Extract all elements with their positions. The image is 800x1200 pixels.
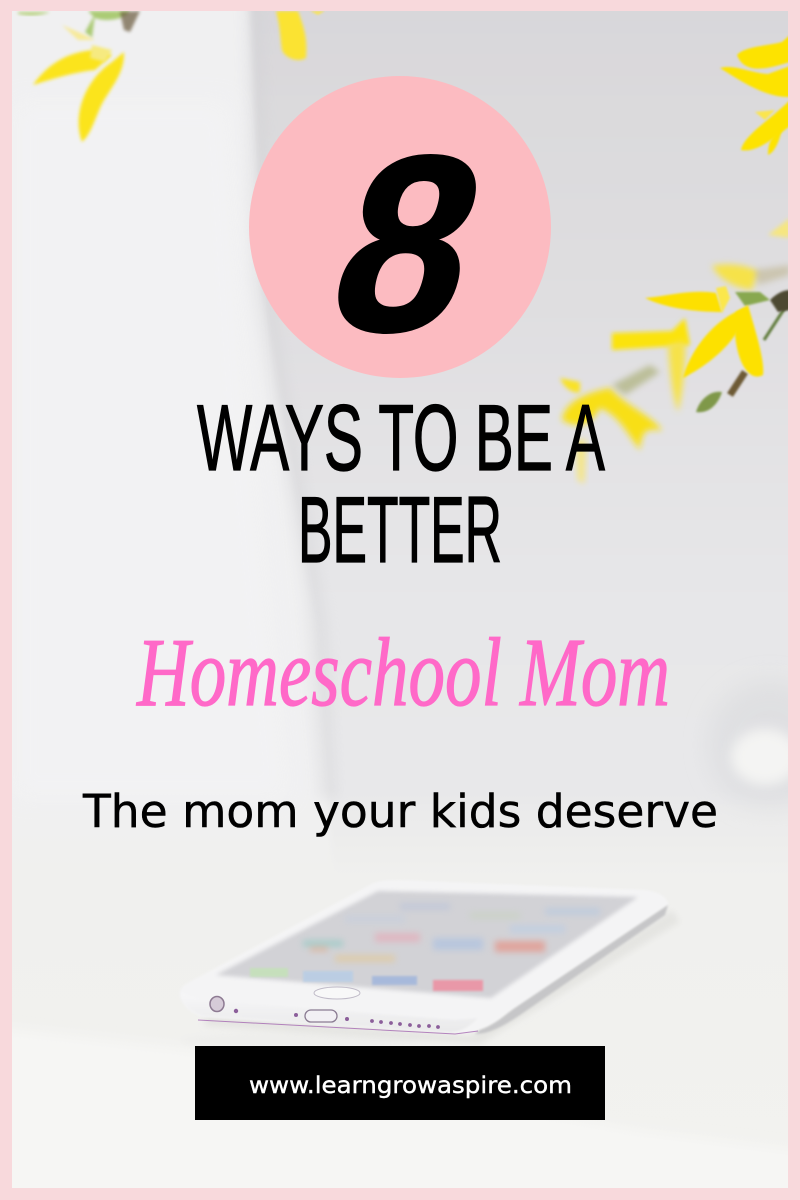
screws (294, 1013, 349, 1021)
phone shadow (205, 910, 680, 1044)
flowers: top right (720, 35, 790, 238)
flowers: middle right branch (560, 264, 790, 484)
phone purple bottom line (198, 1020, 478, 1034)
phone reflection (180, 1032, 420, 1048)
microphone dot (234, 1009, 238, 1013)
flowers: top left (18, 11, 325, 142)
charging port (305, 1010, 337, 1022)
phone body (180, 880, 668, 1033)
far app icons (303, 903, 600, 962)
home button (314, 987, 360, 999)
speaker holes (370, 1019, 440, 1029)
phone screen (216, 891, 638, 998)
banner background (195, 1046, 605, 1120)
phone side edge (475, 905, 668, 1034)
dock app icons (250, 968, 483, 991)
title line 2: BETTER (298, 477, 502, 582)
phone (180, 880, 680, 1048)
headphone jack (210, 996, 224, 1012)
website banner (195, 1046, 605, 1120)
number 8: 8 (309, 105, 508, 384)
phone lower band (182, 992, 478, 1032)
subtitle: The mom your kids deserve (82, 785, 718, 838)
website url: www.learngrowaspire.com (249, 1073, 572, 1099)
pink circle badge (249, 76, 551, 378)
